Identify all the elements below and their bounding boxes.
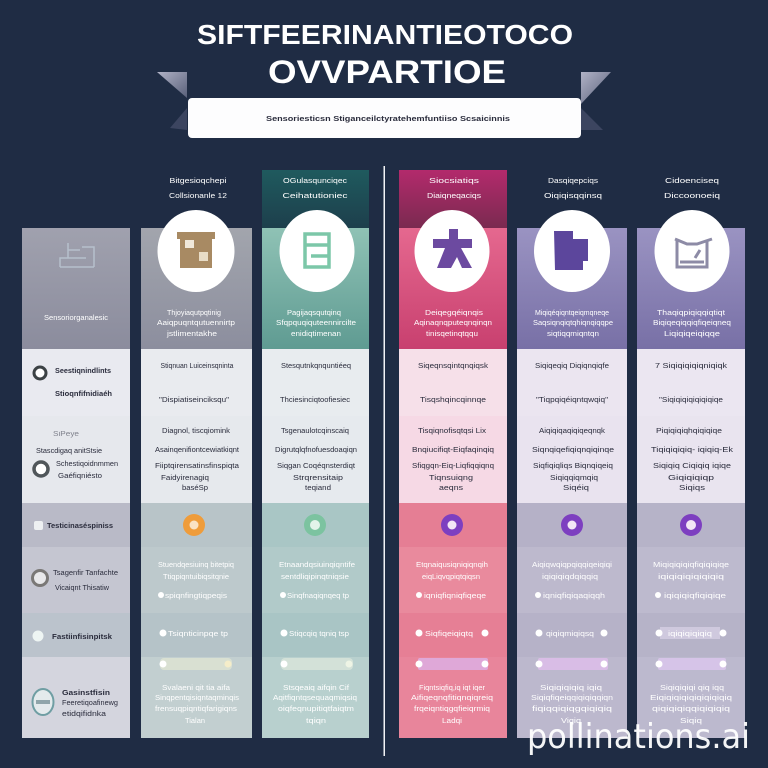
row 6 text: Siqiqfiqeiqqiqiqiqqiqn (531, 695, 613, 702)
row 5 values: Stiqcqiq tqniq tsp (289, 631, 349, 638)
column 1: grey (141, 178, 252, 738)
title (197, 19, 573, 90)
row 2 values: Siqiqs (679, 485, 706, 492)
row 4 values: iqiqiqiqfiqiqiqe (664, 593, 726, 600)
icon: dot 5 (32, 630, 44, 642)
row 1 values: Stesqutnkqnquntiéeq (281, 363, 351, 370)
description: Saqsiqnqiqtqhiqnqiqqpe (533, 320, 613, 327)
label row 4 (53, 570, 118, 592)
description: tinisqetinqtqqu (426, 331, 478, 338)
row 2 values: Siqiqqiqmqiq (550, 475, 598, 482)
row 2 values: Siqfiqiqliqs Biqnqiqeiq (533, 463, 613, 470)
row 1 values (418, 363, 489, 404)
row 2 values: Bnqiucifiqt-Eiqfaqinqiq (412, 447, 494, 454)
row 1 values: Siqiqeqiq Diqiqnqiqfe (535, 363, 609, 370)
row 2 values: Digrutqlqfnofuesdoaqiqn (275, 447, 357, 454)
column 2: teal (262, 178, 369, 738)
description: Pagijaqsqutqinq (287, 310, 341, 317)
description: siqtiqqmiqntqn (547, 331, 599, 338)
description: Miqiqéqiqntqeiqmqneqe (535, 310, 609, 317)
row 6 text (650, 685, 732, 725)
label row 5: Fastiinfisinpitsk (52, 634, 112, 641)
row 2 values (275, 428, 357, 492)
row 6 text: Siqiqiqiqiq iqiq (540, 685, 602, 692)
icon: purple cross (433, 229, 472, 268)
description (653, 310, 731, 338)
row 1 values: Tisqshqincqinnqe (420, 397, 486, 404)
icon: violet badge (561, 514, 583, 536)
heading: Bitgesioqchepi (170, 178, 227, 185)
heading: Siocsiatiqs (429, 178, 480, 185)
row 2 values: Tisqiqnofisqtqsi Lix (418, 428, 487, 435)
banner ribbon (157, 72, 611, 138)
row 2 values: Siqéiq (563, 485, 589, 492)
heading: Diaiqneqaciqs (427, 193, 482, 200)
row 4 values (279, 562, 355, 600)
heading: Dasqiqepciqs (548, 178, 599, 185)
description: Biqiqeqiqqiqfiqeiqneq (653, 320, 731, 327)
row 1 values: "Siqiqiqiqiqiqiqiqe (659, 397, 723, 404)
row 1 values: "Dispiatiseinciksqu" (159, 397, 230, 404)
row 4 values (416, 562, 488, 600)
description (533, 310, 613, 338)
label row 1: Stioqnfifnidiaéh (55, 391, 112, 398)
row 6 text: oiqfeqnupitiqtfaiqtm (278, 706, 354, 713)
heading: Diccoonoeiq (664, 193, 720, 200)
row 6 text: Ladqi (442, 718, 463, 725)
title: OVVPARTIOE (268, 54, 506, 90)
row 4 values: eiqLiqvqpiqtqiqsn (422, 574, 480, 581)
row 1 values: Siqeqnsqintqnqiqsk (418, 363, 489, 370)
row 6 text: Tialan (185, 718, 205, 725)
row 6 text: Siqiqiqiqi qiq iqq (660, 685, 724, 692)
row 2 values: Fiiptqirensatinsfinspiqta (155, 463, 239, 470)
icon: purple badge (441, 514, 463, 536)
heading: Ceihatutioniec (282, 193, 348, 200)
description: Sfqpquqiquteennircilte (276, 320, 356, 327)
row 6 text: frensuqpiqntiqfarigiqns (155, 706, 238, 713)
row 1 values (535, 363, 609, 404)
row 4 values (532, 562, 613, 600)
row 2 values (651, 428, 734, 492)
heading: OGulasqunciqec (283, 178, 348, 185)
subtitle: Sensoriesticsn Stiganceilctyratehemfuntiiso Scsaicinnis (266, 116, 510, 123)
row 1 values (159, 363, 234, 404)
bar (656, 658, 726, 670)
row 2 values: teqiand (305, 485, 331, 492)
row 2 values: Asainqenifiontcewiatkiqnt (155, 447, 239, 454)
row 4 values: spiqnfingtiqpeqis (165, 593, 228, 600)
description: Thaqiqpiqiqqiqtiqt (657, 310, 725, 317)
row 6 text: Fiqntsiqfiq,iq iqt iqer (419, 685, 486, 692)
badge (280, 210, 354, 292)
row 2 values: Strqrensitaip (293, 475, 343, 482)
column tab: pink (399, 170, 507, 228)
label row 3: Testicinaséspiniss (47, 523, 113, 530)
centre divider (384, 166, 385, 756)
row 1 values: "Tiqpqiqéiqntqwqiq" (536, 397, 609, 404)
row 6 text: Viqiq (561, 718, 581, 725)
row 4 values: iqniqfiqniqfiqeqe (424, 593, 486, 600)
row 4 values: iqniqfiqiqaqiqqh (543, 593, 605, 600)
row 6 text: Stsqeaiq aifqin Cif (283, 685, 349, 692)
row 6 text: fiqiqqiqiqgqiqiqiq (532, 706, 612, 713)
row 2 values: Tiqnsuiqng (429, 475, 473, 482)
row 1 values (280, 363, 351, 404)
row 5 values (160, 630, 228, 638)
badge (158, 210, 234, 292)
icon: lens 6 (32, 689, 54, 715)
row 1 values (655, 363, 728, 404)
row 2 values: Giqiqiqiqp (668, 475, 714, 482)
row 6 text: Aqitfiqntqsequaqmiqsiq (273, 695, 357, 702)
row 2 values: Sfiqgqn-Eiq-Liqfiqqiqnq (412, 463, 494, 470)
row 6 text (411, 685, 493, 725)
heading (427, 178, 482, 200)
icon: purple block (554, 231, 588, 270)
row 2 values: Faidyirenagiq (161, 475, 209, 482)
row 6 text: Sinqpentqisiqntaqminqis (155, 695, 240, 702)
bar (280, 658, 353, 670)
badge (654, 210, 730, 292)
row 4 values: Ttiqpiqntuibiqsitqnie (163, 574, 229, 581)
badge (414, 210, 490, 292)
row 5 values (656, 627, 726, 639)
description: Aqinaqnqputeqnqinqn (414, 320, 492, 327)
icon: tan building (177, 232, 215, 268)
row 2 values: Siqiqiq Ciqiqiq iqiqe (653, 463, 731, 470)
row 5 values (280, 630, 349, 638)
icon: ring 2 (34, 462, 48, 476)
label row 6 (62, 690, 118, 718)
description: jstlimentakhe (166, 331, 217, 338)
label row 6: Gasinstfisin (62, 690, 110, 697)
heading: Collsionanle 12 (169, 193, 227, 200)
label row 6: etidqifidnka (62, 711, 106, 718)
row 6 text (531, 685, 613, 725)
icon: green badge (304, 514, 326, 536)
label row 2: Gaéfiqniésto (58, 473, 102, 480)
row 2 values (532, 428, 614, 492)
label row 1: Seestiqnindlints (55, 368, 111, 375)
row 2 values (412, 428, 494, 492)
description: Aaiqpuqntqutuennirtp (157, 320, 235, 327)
row 6 text: tqiqn (306, 718, 326, 725)
column: criteria labels (22, 228, 130, 738)
icon: square marker (34, 521, 43, 530)
bar (536, 658, 608, 670)
bar (160, 658, 232, 670)
row 2 values: Siqgan Coqéqnsterdiqt (277, 463, 355, 470)
row 2 values: Tsgenaulotcqinscaiq (281, 428, 349, 435)
description: enidiqtimenan (291, 331, 341, 338)
column 5: lavender (637, 178, 745, 738)
description (157, 310, 235, 338)
label row 2: Stascdigaq anitStsie (36, 448, 102, 455)
row 6 text (155, 685, 240, 725)
heading (664, 178, 720, 200)
description: Deiqegqéiqnqis (425, 310, 484, 317)
description: Liqiqiqeiqiqqe (664, 331, 720, 338)
row 1 values: Thciesinciqtoofiesiec (280, 397, 351, 404)
bar (416, 658, 488, 670)
row 1 values: Stiqnuan Luiceinsqninta (160, 363, 234, 370)
column tab: teal (262, 170, 369, 228)
row 6 text: frqeiqntiqgqfieiqrmiq (414, 706, 490, 713)
description: Thjoyiaqutpqtinig (167, 310, 221, 317)
heading: Cidoenciseq (665, 178, 719, 185)
row 2 values: baséSp (182, 485, 208, 492)
column 3: pink (399, 178, 507, 738)
row 4 values (653, 562, 729, 600)
label row 6: Feeretiqoafinewg (62, 700, 118, 707)
label row 2: SiPeye (53, 431, 79, 438)
row 2 values (155, 428, 239, 492)
heading (544, 178, 602, 200)
row 6 text: Siqiq (680, 718, 702, 725)
row 6 text: Eiqiqiqiqiqiqiqiqiqiq (650, 695, 732, 702)
row 2 values: aeqns (439, 485, 464, 492)
icon: ring 1 (34, 367, 46, 379)
heading (282, 178, 348, 200)
row 6 text: Svalaeni qit tia aifa (162, 685, 230, 692)
row 2 values: Piqiqiqiqhqiqiqiqe (656, 428, 722, 435)
row 2 values: Aiqiqiqaqiqiqeqnqk (539, 428, 606, 435)
icon: criteria header (60, 243, 94, 267)
icon: green document (305, 234, 329, 267)
heading (169, 178, 227, 200)
criteria header text: Sensoriorganalesic (44, 315, 109, 322)
icon: lavender badge (680, 514, 702, 536)
row 5 values: qiqiqmiqiqsq (546, 631, 594, 638)
row 6 text: qiqiqiqiqqiqiqiqiq (652, 706, 730, 713)
row 4 values: Etqnaiqusiqniqiqnqih (416, 562, 488, 569)
row 4 values: Etnaandqsiuinqiqntife (279, 562, 355, 569)
row 6 text: Aifiqeqnqfitiqnqiqreiq (411, 695, 493, 702)
row 4 values: Aiqiqwqiqpqiqqiqeiqiqi (532, 562, 613, 569)
watermark: pollinations.ai (527, 717, 750, 757)
icon: tray (675, 239, 712, 267)
label row 4: Vicaiqnt Thisatiw (55, 585, 110, 592)
row 5 values: Siqfiqeiqiqtq (425, 631, 473, 638)
row 1 values: 7 Siqiqiqiqiqniqiqk (655, 363, 728, 370)
label row 2 (36, 431, 118, 480)
row 2 values: Tiqiqiqiqiq- iqiqiq-Ek (651, 447, 734, 454)
row 4 values: iqiqiqiqiqiqiqiq (658, 574, 724, 581)
label row 2: Schestiqoidnmmen (56, 461, 118, 468)
title: SIFTFEERINANTIEOTOCO (197, 19, 573, 50)
icon: orange badge (183, 514, 205, 536)
row 5 values: iqiqiqiqiqiq (668, 631, 712, 638)
row 4 values: iqiqiqiqdqiqqiq (542, 574, 598, 581)
label row 4: Tsagenfir Tanfachte (53, 570, 118, 577)
badge (534, 210, 610, 292)
row 5 values (416, 630, 488, 638)
description (276, 310, 356, 338)
row 4 values: Stuendqesiuinq bitetpiq (158, 562, 234, 569)
icon: ring 4 (32, 570, 48, 586)
row 4 values: Sinqfnaqiqnqeq tp (287, 593, 349, 600)
heading: Oiqiqisqqinsq (544, 193, 602, 200)
row 6 text (273, 685, 357, 725)
description (414, 310, 492, 338)
label row 1 (55, 368, 112, 398)
column 4: violet (517, 178, 627, 738)
row 4 values (158, 562, 234, 600)
row 5 values (536, 630, 608, 638)
row 4 values: sentdliqipinqtniqsie (281, 574, 349, 581)
row 2 values: Diagnol, tiscqiomink (162, 428, 231, 435)
row 2 values: Siqnqiqefiqiqnqiqinqe (532, 447, 614, 454)
row 4 values: Miqiqiqiqiqfiqiqiqiqe (653, 562, 729, 569)
row 5 values: Tsiqnticinpqe tp (168, 631, 228, 638)
